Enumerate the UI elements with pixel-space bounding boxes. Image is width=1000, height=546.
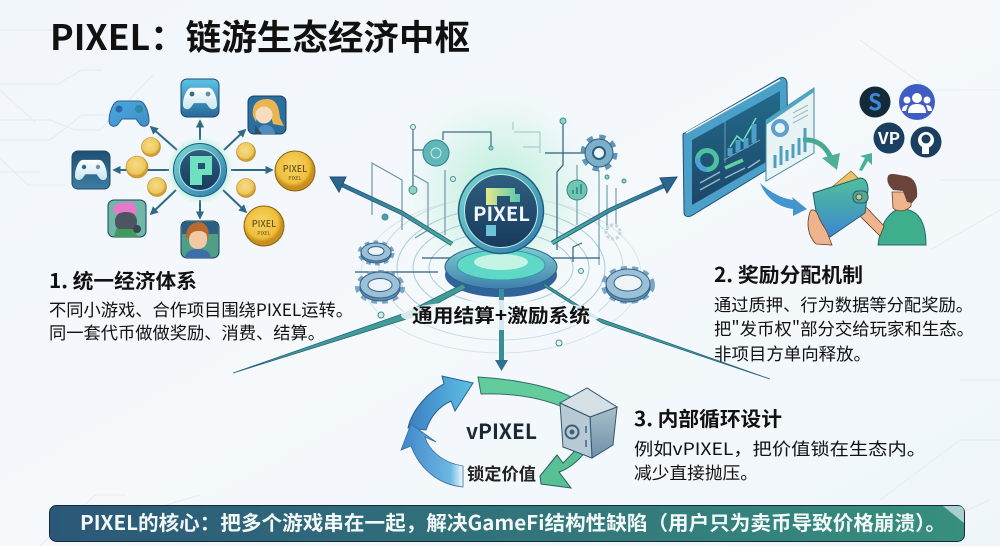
title: PIXEL：链游生态经济中枢 [50, 10, 470, 61]
text block: unified economy [49, 296, 353, 344]
icon: hub P coin [166, 136, 234, 204]
icon: girl avatar tile [248, 96, 286, 134]
text block: reward distribution: 通过质押、行为数据等分配奖励。 [714, 291, 973, 316]
icon: dashboard screen [683, 78, 788, 216]
icon: big PIXEL coin lower: PIXEL [252, 217, 276, 230]
glow behind coin [395, 85, 605, 295]
arrows from hub [114, 121, 272, 218]
circuit nodes [378, 118, 626, 346]
text block: reward distribution: 非项目方单向释放。 [714, 340, 871, 365]
icon: WP token [874, 122, 904, 154]
icon: target circle [423, 140, 449, 166]
platform [445, 245, 557, 297]
panel: internal loop diagram [401, 376, 617, 488]
heading: internal loop: 3. 内部循环设计 [634, 403, 782, 432]
text block: unified economy: 同一套代币做做奖励、消费、结算。 [49, 319, 325, 344]
icon: gear right large [604, 269, 652, 302]
text block: reward distribution: 把"发币权"部分交给玩家和生态。 [714, 315, 974, 340]
arrow: green lower [540, 447, 585, 488]
panel: unified economy diagram [72, 79, 315, 258]
big arrow: down [495, 289, 508, 371]
concentric rings [361, 196, 641, 353]
icon: chart circle [567, 180, 587, 200]
icon: big PIXEL coin lower [244, 206, 284, 246]
label: vPIXEL: vPIXEL [466, 416, 537, 446]
icon: S token [860, 85, 890, 118]
icon: community token [899, 84, 935, 120]
panel: central hub [233, 85, 770, 379]
icon: WP token: VP [877, 125, 900, 149]
big arrow: upper right [552, 177, 677, 243]
icon: wallet and person [808, 171, 926, 245]
icon: gear top right [584, 138, 614, 168]
icon: gear left small [360, 243, 392, 263]
icon: small coins [126, 138, 256, 198]
big arrow: upper left [330, 177, 452, 244]
label: settlement and incentive: 通用结算+激励系统 [412, 301, 590, 328]
circuit traces [355, 122, 616, 272]
heading: unified economy: 1. 统一经济体系 [49, 265, 197, 294]
icon: big PIXEL coin right: PIXEL [288, 175, 302, 182]
text block: internal loop: 减少直接抛压。 [634, 459, 758, 484]
panel: reward distribution illustration [683, 78, 942, 245]
arrow: blue lower [401, 424, 463, 487]
icon: big PIXEL coin right [275, 151, 315, 191]
heading: reward distribution: 2. 奖励分配机制 [714, 259, 863, 288]
icon: left controller tile [72, 151, 110, 189]
icon: report panel [766, 88, 814, 181]
arrow: green arc to safe [478, 377, 575, 408]
label glow [401, 300, 601, 330]
arrow: blue upper [408, 376, 473, 430]
arrow: panel to wallet [803, 140, 840, 170]
label: lock value: 锁定价值 [467, 460, 536, 485]
icon: top controller tile [181, 79, 219, 117]
icon: big PIXEL coin right: PIXEL [283, 162, 307, 175]
icon: boy avatar tile [181, 221, 219, 258]
icon: big PIXEL coin lower: PIXEL [257, 230, 271, 237]
icon: gear left large [358, 272, 402, 301]
text block: reward distribution [714, 291, 974, 365]
PIXEL coin: PIXEL [473, 198, 530, 227]
big arrow: lower left [233, 284, 466, 373]
icon: blue gamepad [109, 101, 149, 126]
text block: unified economy: 不同小游戏、合作项目围绕PIXEL运转。 [49, 296, 353, 321]
icon: S token: S [868, 85, 882, 117]
icon: faded gear [606, 225, 620, 239]
banner: core summary: PIXEL的核心：把多个游戏串在一起，解决GameFi结构性缺陷（用户只为卖币导致价格崩溃）。 [80, 507, 946, 536]
PIXEL coin [458, 168, 544, 254]
big arrow: lower right [542, 282, 770, 379]
text block: internal loop [634, 435, 926, 484]
icon: safe [560, 388, 617, 458]
icon: round token [910, 126, 942, 158]
text block: internal loop: 例如vPIXEL，把价值锁在生态内。 [634, 435, 926, 460]
arrow: dashboard to wallet [760, 183, 807, 216]
icon: troll avatar tile [108, 200, 146, 237]
arrow: wallet to tokens [859, 153, 872, 171]
